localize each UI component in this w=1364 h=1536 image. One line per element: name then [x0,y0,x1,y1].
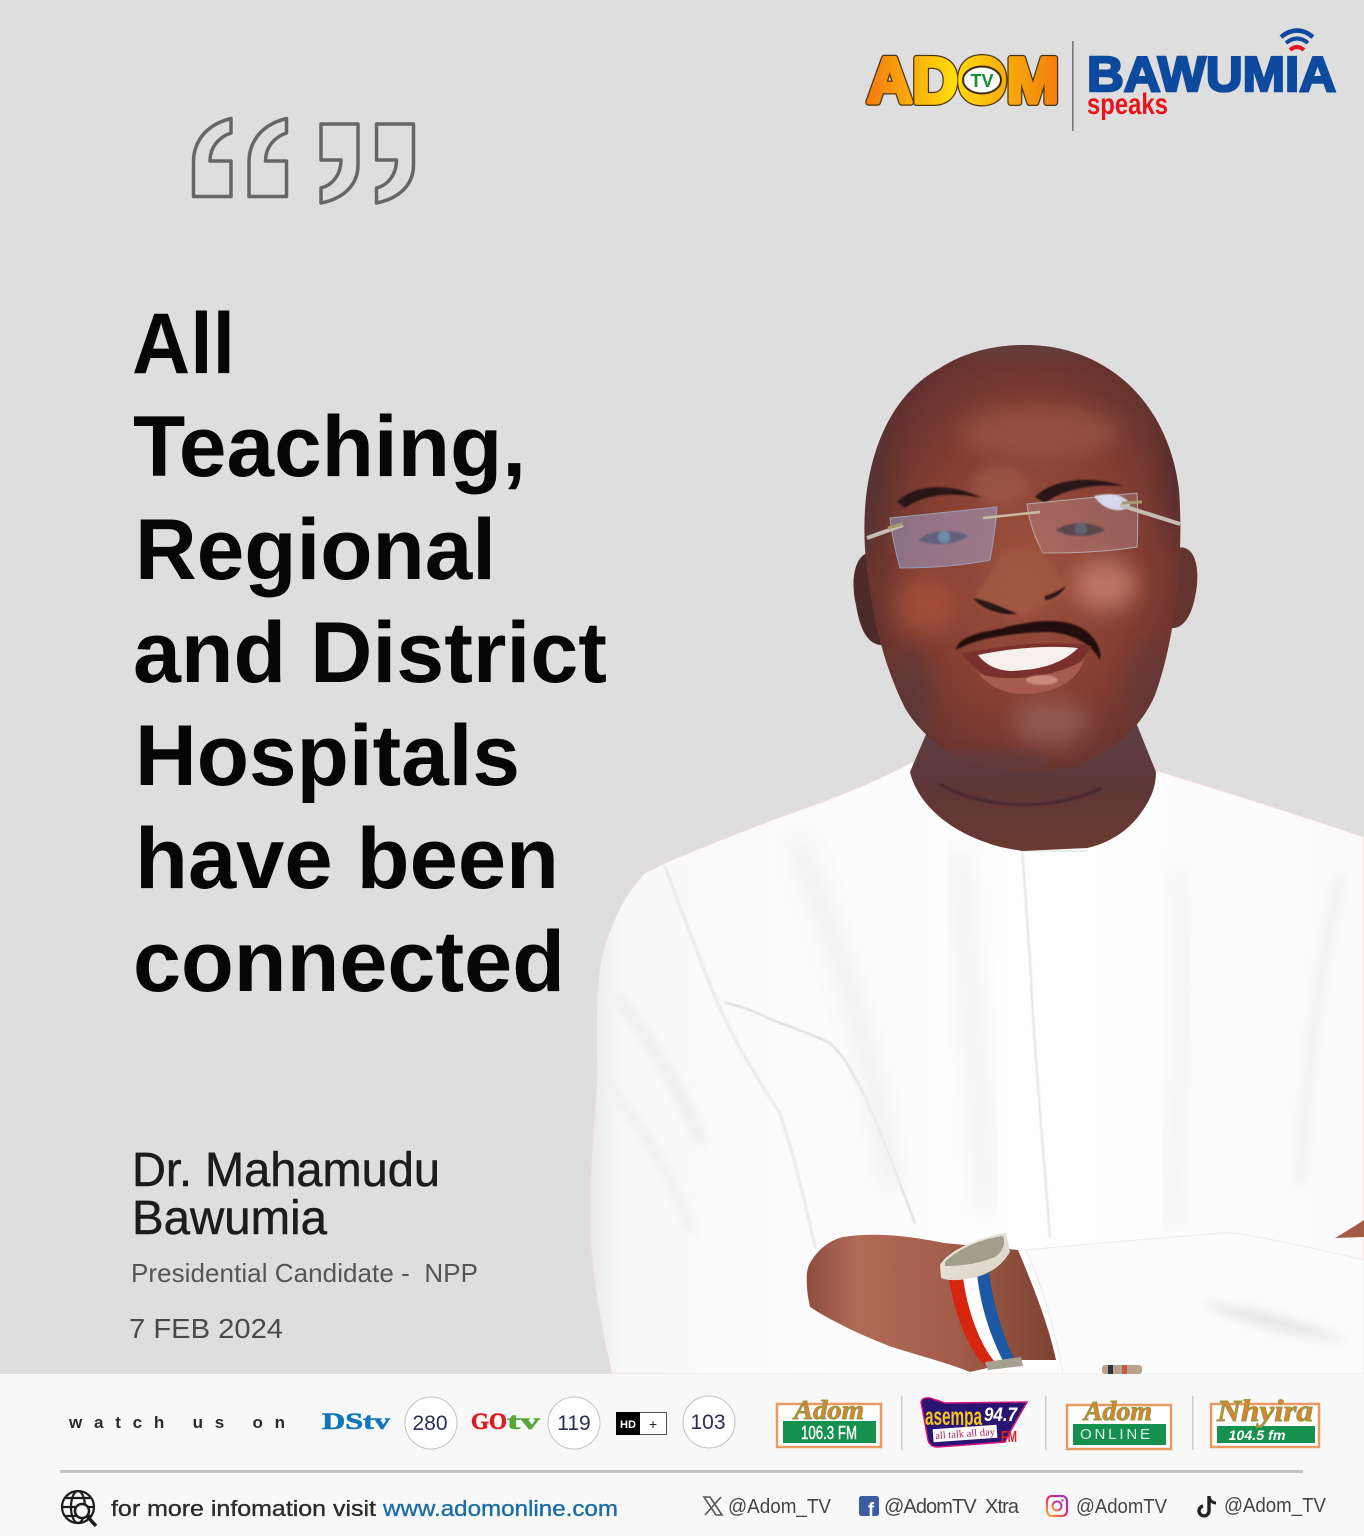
footer website line: for more infomation visit [111,1496,376,1521]
logo: Asempa 94.7 FM: 94.7 [984,1405,1018,1426]
portrait: head [864,345,1180,772]
icon: quotation marks [194,118,414,203]
portrait: cheek highlights [895,575,955,635]
logo: HD+: HD [620,1419,636,1431]
speaker name: Dr. Mahamudu [132,1144,440,1197]
logo: GOtv [471,1409,541,1434]
footer rule [60,1470,1303,1473]
portrait: left ear [853,553,886,645]
portrait: neck [910,720,1156,851]
channel badge: 119: 119 [557,1412,591,1435]
channel badge: 103: 103 [690,1411,726,1434]
portrait: temple shadows [864,423,889,553]
logo: Adom TV: TV [970,71,994,91]
headline quote: have been [135,811,559,907]
logo: Adom 106.3 FM [777,1395,881,1447]
logo: Adom Online: Adom [1082,1396,1152,1426]
logo: Asempa 94.7 FM: asempa [925,1403,983,1431]
logo: Nhyira 104.5 fm [1211,1393,1319,1447]
speaker title: Presidential Candidate - NPP [131,1258,478,1288]
logo: Asempa 94.7 FM: FM [1001,1429,1017,1446]
portrait: cufflink [1102,1365,1142,1374]
icon: globe with magnifier [62,1491,96,1526]
portrait: shirt folds and seams [612,850,1340,1247]
headline quote: and District [133,605,607,701]
social: Facebook: f [868,1500,875,1521]
headline quote: Regional [135,502,496,598]
logo divider [1072,41,1074,131]
logo: Adom TV: ADOM [867,44,1059,116]
footer: watch us on: w a t c h u s o n [68,1413,285,1432]
portrait: sleeve shadow [1200,1302,1350,1340]
portrait: Dr. Bawumia [590,336,1364,1374]
portrait: nose [973,548,1068,614]
social: TikTok: @Adom_TV [1224,1495,1327,1517]
logo: Bawumia speaks: BAWUMIA [1087,48,1336,102]
footer website line [111,1496,618,1521]
headline quote [132,296,607,1010]
portrait: glasses [867,493,1180,568]
portrait: forehead highlights [960,406,1120,458]
divider [901,1396,902,1450]
logo: Adom 106.3 FM: Adom [792,1395,864,1425]
channel badge: 103 [683,1396,735,1448]
social: Instagram: @AdomTV [1076,1496,1168,1518]
logo: DStv: DStv [322,1409,391,1434]
logo: Adom Online: ONLINE [1080,1426,1150,1443]
icon: wristwatch [940,1233,1023,1370]
logo: Adom TV: ADOM [867,44,1059,116]
logo: Adom 106.3 FM: 106.3 FM [801,1423,857,1443]
headline quote: Teaching, [133,399,526,495]
portrait: moustache [956,621,1100,660]
channel badge: 280 [405,1397,457,1449]
logo: Adom Online [1067,1396,1171,1449]
date: 7 FEB 2024 [129,1313,283,1344]
social: Facebook: @AdomTV Xtra [884,1496,1020,1518]
portrait: jaw shading [892,650,932,740]
portrait: skin tones [864,345,1180,770]
logo: GOtv: GO [471,1409,507,1434]
portrait: smile [962,643,1092,694]
portrait: sleeve cuff [1026,1233,1364,1374]
logo: Nhyira 104.5 fm: Nhyira [1216,1393,1313,1428]
headline quote: All [132,296,235,392]
logo: Asempa 94.7 FM [921,1398,1027,1447]
headline quote: connected [133,914,565,1010]
logo: HD+: + [649,1416,657,1432]
channel badge: 280: 280 [412,1412,448,1435]
portrait: crossed forearm [807,1235,1056,1372]
portrait: eyes [918,523,1105,544]
portrait: right ear [1170,547,1197,628]
portrait: chin highlight [1012,698,1088,746]
portrait: eyebrows [897,480,1123,508]
divider [1045,1396,1046,1450]
speaker name: Bawumia [132,1192,327,1245]
footer website line: www.adomonline.com [382,1496,618,1521]
channel badge: 119 [548,1397,600,1449]
portrait: hand [1335,1220,1364,1238]
speaker name [132,1144,440,1245]
headline quote: Hospitals [135,708,520,804]
footer panel [0,1374,1364,1536]
logo: Nhyira 104.5 fm: 104.5 fm [1228,1427,1286,1443]
portrait: shirt [590,762,1364,1374]
logo: GOtv: tv [507,1409,541,1434]
social: X: @Adom_TV [728,1496,832,1518]
logo: Bawumia speaks: speaks [1087,88,1168,121]
logo: Bawumia speaks [1087,30,1336,121]
divider [1192,1396,1194,1450]
portrait: neck crease [940,784,1102,805]
logo: Asempa 94.7 FM: all talk all day [935,1427,996,1442]
logo: HD+ [616,1412,666,1435]
